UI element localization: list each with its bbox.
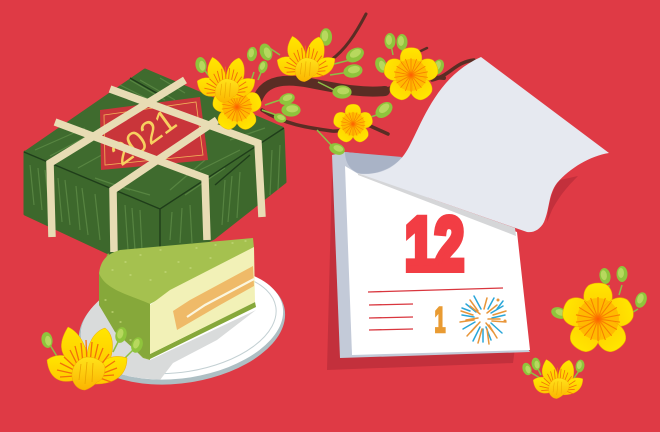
flower: top centre: [277, 36, 335, 82]
day number: 1: [434, 301, 446, 340]
under curl: [345, 152, 402, 174]
blossoms on branch: [194, 28, 446, 157]
note lines: [369, 304, 413, 330]
fireworks: [460, 296, 506, 344]
cake left side: [99, 253, 150, 360]
cake speckles: [105, 241, 246, 340]
white page: [345, 166, 530, 355]
cake on plate: [79, 238, 286, 385]
curled page: [360, 57, 609, 232]
page shadow: [547, 176, 578, 222]
cake cream line: [187, 279, 254, 317]
flower: top left: [197, 57, 255, 103]
fold: [358, 173, 516, 236]
flower: open left: [211, 82, 263, 133]
top face: [26, 70, 282, 208]
red card: [100, 97, 208, 173]
card year: 2021: [104, 102, 183, 173]
cake crust edge: [99, 273, 256, 359]
leaf streaks: [30, 78, 280, 250]
blossom bottom right: [521, 357, 585, 399]
calendar: [327, 57, 609, 370]
plate: [79, 276, 286, 385]
banh chung: [24, 70, 285, 256]
flower: open right: [382, 48, 440, 104]
wrapped body side: [25, 130, 285, 256]
cake top: [99, 238, 254, 304]
back page: [332, 152, 530, 358]
cake cream: [150, 247, 255, 354]
plate shadow: [70, 300, 256, 380]
blossoms near cake: [40, 326, 145, 390]
cake filling: [173, 266, 254, 330]
string bands: [50, 80, 262, 252]
month number: 12: [405, 202, 464, 286]
date rule: [368, 288, 503, 292]
branch: [258, 14, 474, 134]
calendar shadow: [327, 170, 516, 370]
blossom lower right: [550, 266, 649, 356]
flower: small open: [332, 104, 374, 145]
